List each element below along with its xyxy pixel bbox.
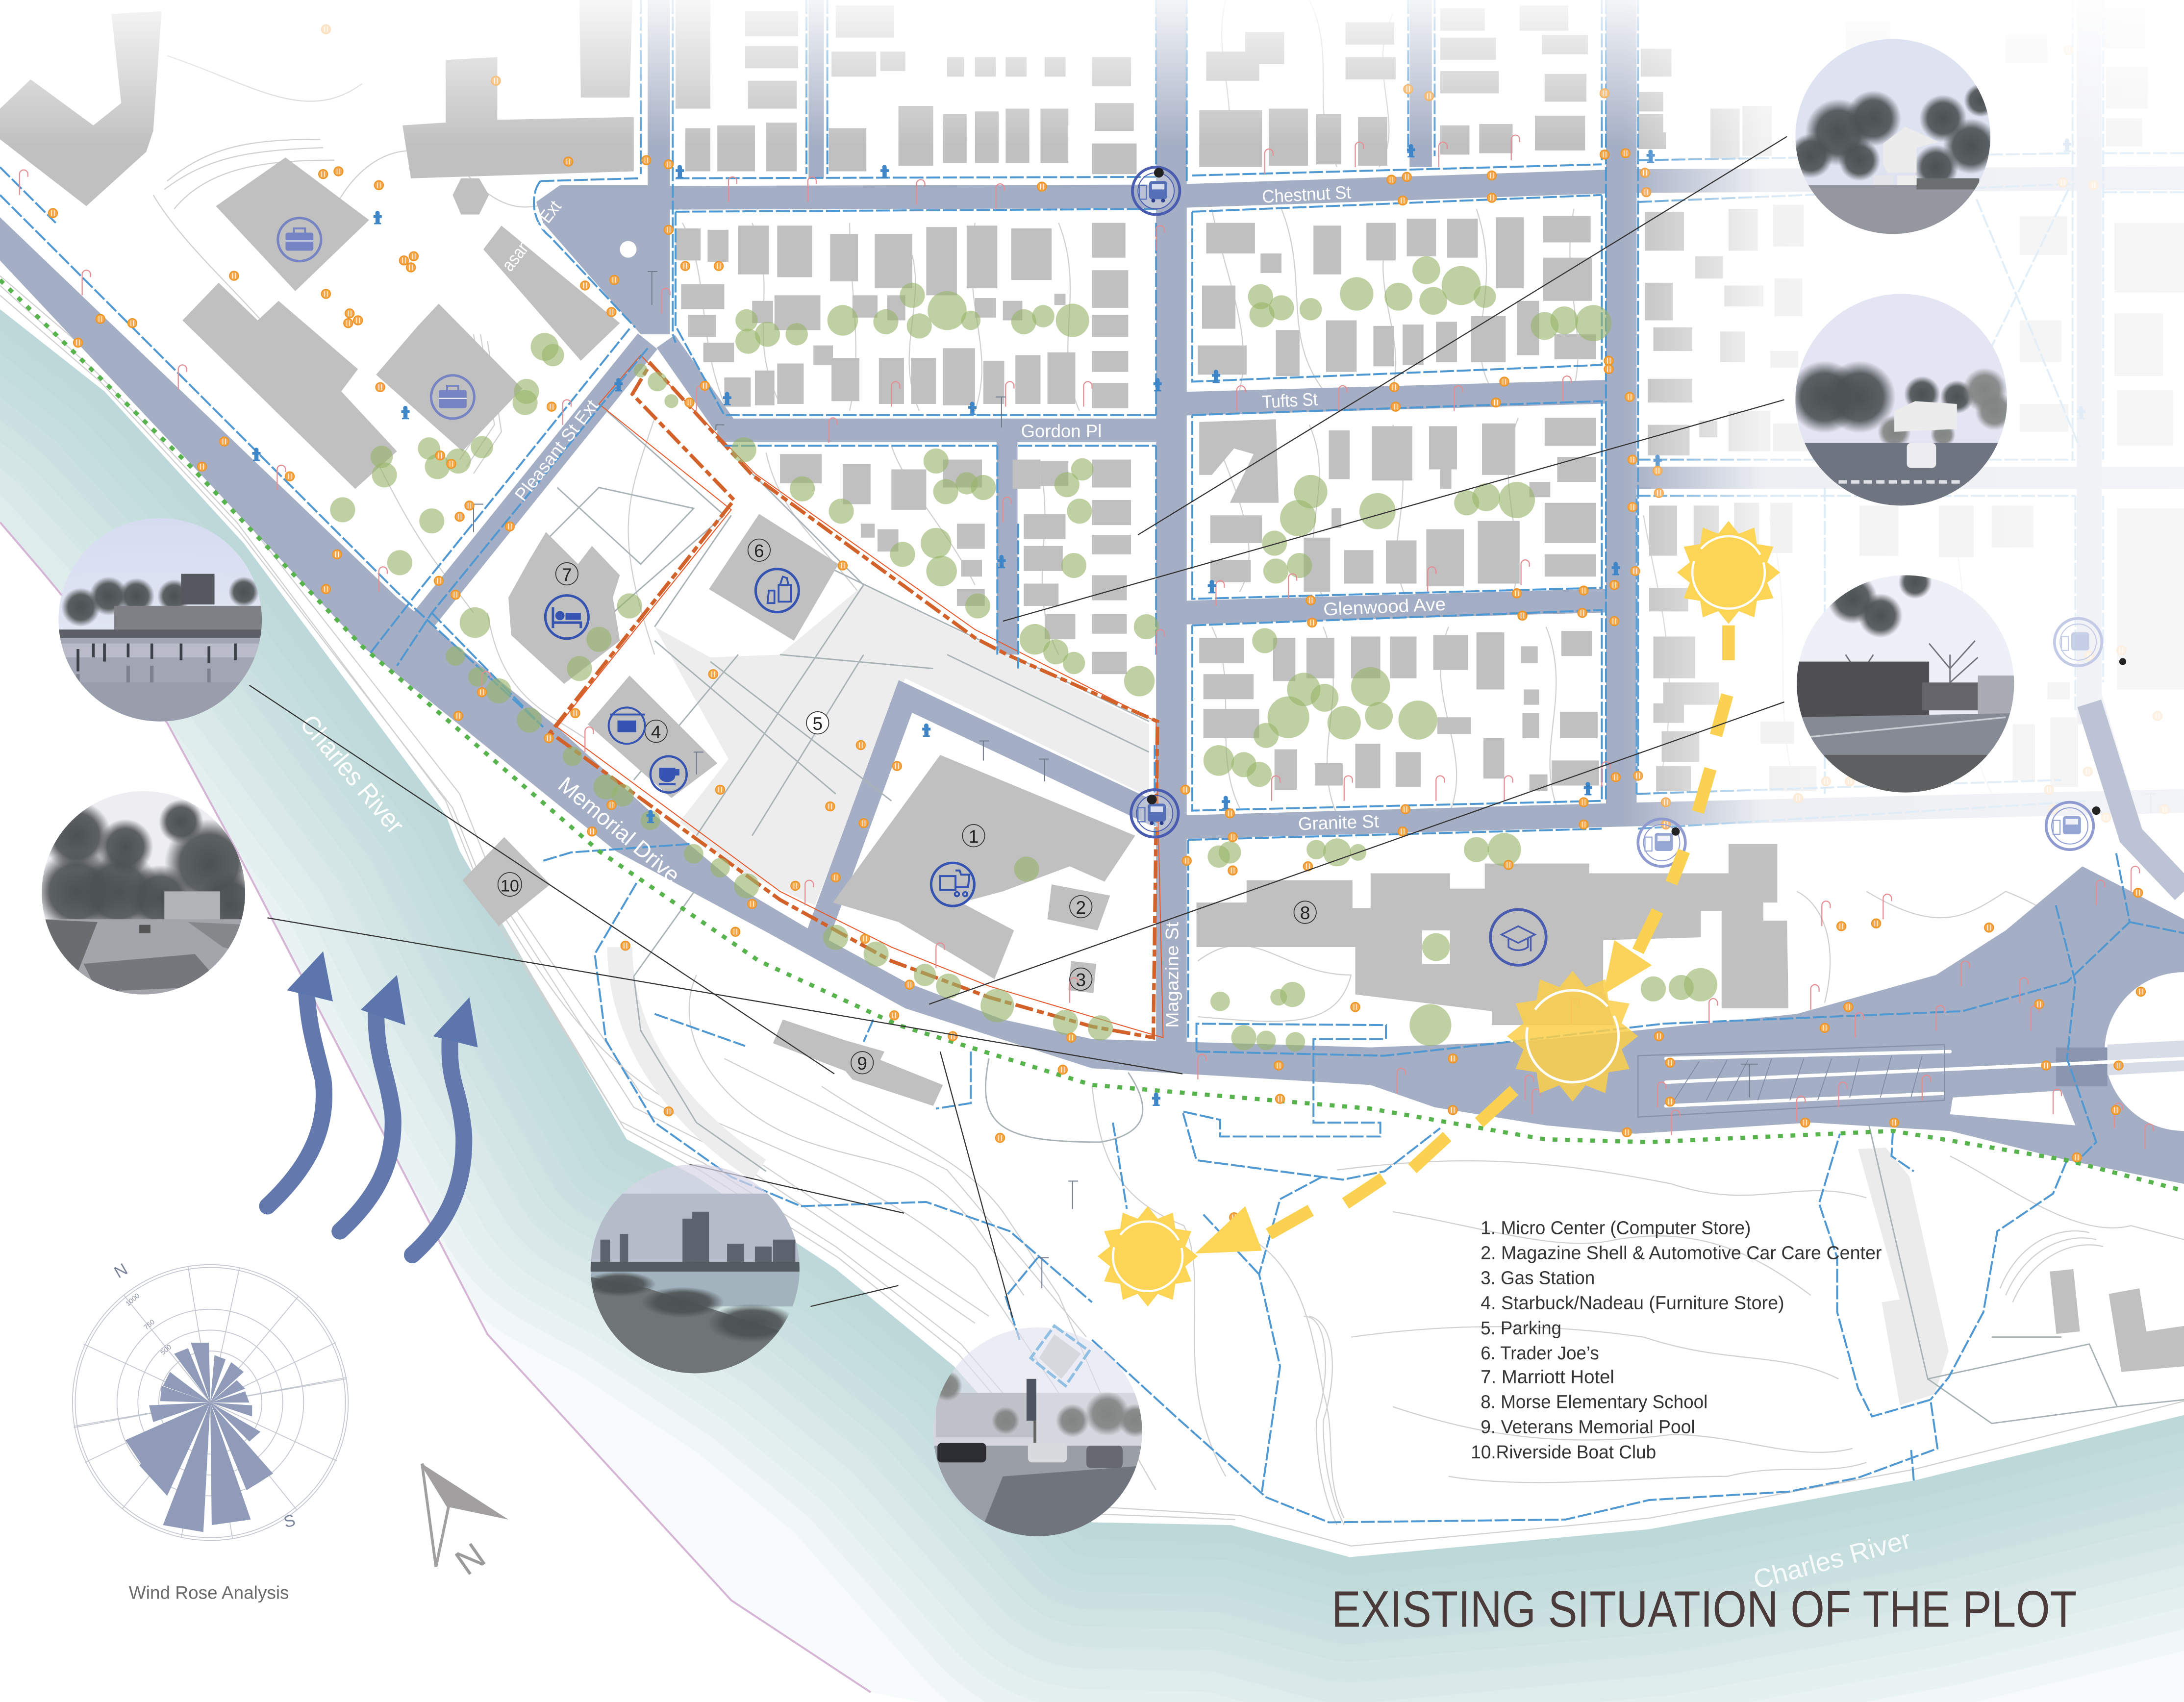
marker 8 [1294, 901, 1316, 924]
title: EXISTING SITUATION OF THE PLOT [1331, 1581, 2077, 1638]
sun path dashes lower [1269, 1091, 1514, 1234]
leader lines [250, 136, 1787, 1318]
photo: houses corner [1795, 39, 1990, 234]
marker 8: 8 [1300, 903, 1310, 923]
legend list [1471, 1217, 1882, 1463]
numbered building markers [498, 539, 1316, 1074]
wind arrow 1 [268, 951, 333, 1206]
label Charles River: Charles River [294, 709, 410, 839]
label Gordon Pl: Gordon Pl [1021, 421, 1102, 441]
photo: Magazine St street [933, 1327, 1142, 1536]
label Pleasant St Ext upper: asant St Ext [498, 197, 565, 275]
wind rose [73, 1260, 348, 1540]
icon: bus stop Morse [1638, 819, 1685, 866]
marker 3 [1070, 968, 1092, 990]
icon: briefcase 2 [431, 375, 474, 419]
icon: bus stop east [2046, 802, 2093, 850]
legend item 8: 8. Morse Elementary School [1481, 1391, 1707, 1412]
icon: graduation cap [1490, 909, 1546, 965]
houses contour lines [682, 223, 1079, 411]
marker 1: 1 [969, 826, 979, 847]
plaza diamond [1030, 1326, 1089, 1386]
wind rose scale: 750 [143, 1318, 156, 1331]
wind rose grid [73, 1265, 348, 1540]
label Tufts St: Tufts St [1261, 389, 1318, 412]
label Granite St: Granite St [1298, 811, 1380, 834]
wind arrow 2 [340, 975, 405, 1231]
legend item 6: 6. Trader Joe’s [1481, 1343, 1599, 1364]
marker 4: 4 [651, 722, 661, 742]
green pedestrian dotted route [0, 280, 2184, 1191]
sun path dashes [1638, 626, 1729, 951]
road over parking [813, 697, 1156, 947]
icon: coffee cup [651, 756, 687, 793]
legend item 3: 3. Gas Station [1481, 1268, 1595, 1289]
rotary ring [2058, 926, 2184, 1177]
loop path near Memorial Drive [985, 1058, 1143, 1142]
legend item 2: 2. Magazine Shell & Automotive Car Care Center [1481, 1242, 1882, 1263]
icon: shopping cart [931, 863, 974, 906]
wind rose caption: Wind Rose Analysis [129, 1583, 289, 1603]
east curved road [2089, 703, 2184, 891]
Morse School [1197, 844, 1788, 1025]
houses upper row [685, 128, 710, 171]
sun spike east [1195, 1206, 1262, 1253]
trees [330, 256, 1717, 1051]
bus stop markers [1147, 168, 2126, 836]
label Charles River lower: Charles River [1750, 1525, 1914, 1595]
label Magazine St: Magazine St [1162, 922, 1182, 1028]
wind rose N label: N [111, 1260, 131, 1282]
streets network [418, 0, 2184, 1045]
marker 4 [645, 720, 667, 742]
pale runway strip [1858, 1148, 1949, 1405]
photo: Gordon intersection [1795, 294, 2007, 505]
north letter: N [448, 1535, 493, 1583]
pale park pathway band [620, 947, 759, 1170]
icon: groceries [755, 569, 799, 612]
marker 9 [851, 1051, 873, 1074]
north arrow [422, 1464, 508, 1583]
wind arrow 3 [412, 997, 478, 1255]
marker 10 [498, 873, 522, 896]
marker 9: 9 [857, 1053, 867, 1074]
marker 2 [1070, 896, 1092, 918]
wind rose scale [125, 1292, 173, 1357]
photo: Morse School field [1797, 575, 2014, 793]
lamp posts [20, 135, 2153, 1149]
runway and garden paths [1866, 1114, 2184, 1424]
legend item 4: 4. Starbuck/Nadeau (Furniture Store) [1481, 1293, 1784, 1314]
Pleasant St plaza [536, 185, 669, 334]
park gravel path [634, 889, 766, 1171]
legend item 1: 1. Micro Center (Computer Store) [1481, 1217, 1751, 1238]
marker 7 [556, 563, 578, 585]
river pink boundary line [0, 522, 871, 1692]
orange utility dots [49, 25, 2169, 1222]
icon: bus stop north east [2055, 619, 2102, 666]
label Pleasant St Ext: Pleasant St Ext [511, 396, 602, 505]
icon: hotel bed [545, 596, 588, 639]
utility poles [474, 272, 2156, 1288]
sun middle [1507, 971, 1638, 1101]
houses Chestnut to Gordon [676, 228, 701, 260]
marker 2: 2 [1076, 898, 1086, 918]
icon: furniture sofa [609, 707, 645, 744]
sun lower [1098, 1206, 1198, 1306]
site boundary: thin red [557, 355, 1163, 1038]
marker 5: 5 [813, 714, 823, 734]
marker 5 [806, 712, 829, 734]
houses Tufts to Glenwood [1199, 419, 1279, 503]
sun top [1677, 521, 1780, 624]
marker 10: 10 [501, 876, 519, 895]
wind arrows [268, 951, 478, 1255]
top fade [0, 0, 2184, 146]
photo: river skyline [591, 1164, 800, 1373]
icon: bus stop Granite [1131, 790, 1179, 837]
marker 6 [748, 539, 770, 561]
legend item 9: 9. Veterans Memorial Pool [1481, 1417, 1695, 1438]
icon: briefcase [278, 218, 321, 261]
houses next to Magazine [1092, 223, 1126, 258]
sun pointing spike [1603, 940, 1652, 995]
hydrants [252, 138, 2085, 1106]
icon: bus stop Chestnut [1132, 167, 1180, 215]
label Chestnut St: Chestnut St [1261, 182, 1352, 207]
houses far east [1641, 49, 1671, 76]
label Glenwood Ave: Glenwood Ave [1323, 594, 1446, 620]
wind rose scale: 500 [159, 1343, 173, 1357]
marker 3: 3 [1076, 970, 1086, 990]
label Memorial Drive: Memorial Drive [553, 772, 685, 888]
houses Glenwood to Granite [1199, 638, 1244, 663]
marker 1 [962, 825, 985, 847]
Micro Center [833, 755, 1135, 979]
marker 7: 7 [562, 565, 572, 585]
wind rose scale: 1000 [125, 1292, 141, 1308]
legend item 7: 7. Marriott Hotel [1481, 1366, 1614, 1387]
Memorial Drive [0, 217, 2184, 1184]
parking lots pale [654, 585, 1149, 905]
plaza island [620, 241, 636, 258]
houses Chestnut to Tufts [1206, 223, 1255, 253]
legend item 10: 10.Riverside Boat Club [1471, 1442, 1656, 1463]
wind rose S label: S [282, 1511, 297, 1532]
land mask south-west of river [0, 522, 919, 1702]
marker 6: 6 [754, 541, 764, 561]
site boundary: orange dashed [550, 364, 1157, 1038]
wind rose petals [126, 1343, 273, 1532]
houses Gordon south [780, 454, 822, 483]
houses east of Magazine top [1199, 110, 1262, 167]
photo: splash plaza [58, 518, 262, 722]
legend item 5: 5. Parking [1481, 1318, 1561, 1339]
street labels [294, 182, 1914, 1595]
photo: Memorial Drive street [42, 791, 245, 995]
school courtyard window [1422, 930, 1450, 964]
Memorial Drive parking island [1638, 1040, 2184, 1126]
white fades [1623, 0, 2184, 836]
parking lines [543, 404, 1149, 836]
